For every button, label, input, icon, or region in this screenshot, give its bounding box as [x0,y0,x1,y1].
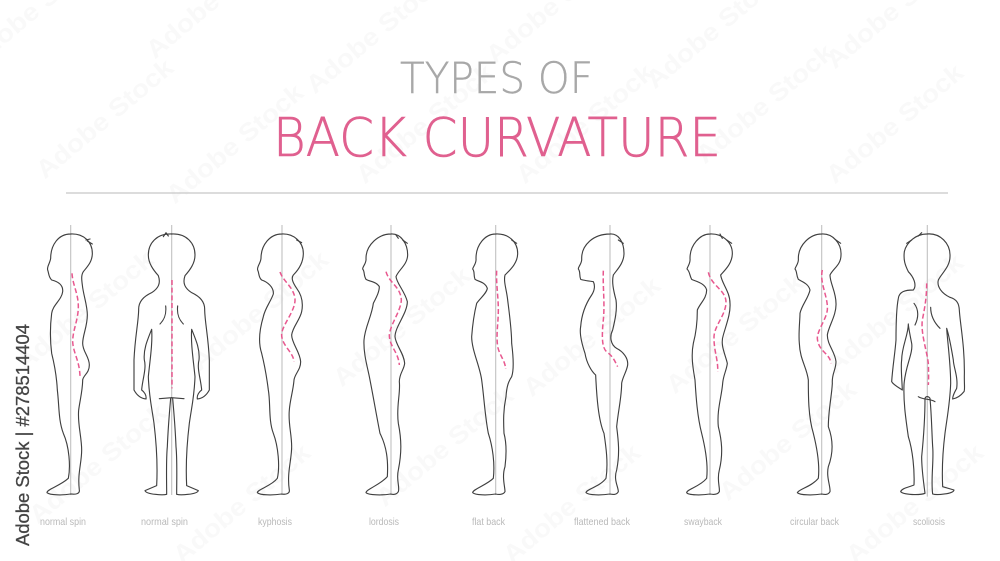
title: types of: TYPES OF [400,54,593,104]
watermark pattern: Adobe Stock [691,38,839,169]
label: kyphosis: kyphosis [258,516,292,528]
figure: swayback [687,225,732,495]
label: lordosis: lordosis [369,516,399,528]
figure: kyphosis [257,225,303,495]
label: scoliosis: scoliosis [913,516,945,528]
label: circular back: circular back [790,516,840,528]
watermark pattern: Adobe Stock [161,78,309,209]
figure: flat back [472,225,518,495]
label: normal spin: normal spin [141,516,188,528]
watermark pattern: Adobe Stock [371,381,519,512]
stock id vertical text: Adobe Stock | #278514404 [13,324,33,546]
watermark pattern: Adobe Stock [24,398,172,529]
title: back curvature: BACK CURVATURE [273,106,721,169]
watermark pattern: Adobe Stock [511,58,659,189]
watermark pattern: Adobe Stock [821,58,969,189]
figure: lordosis [363,225,408,495]
figure: circular back [795,225,841,495]
watermark pattern: Adobe Stock [661,268,809,399]
watermark pattern: Adobe Stock [11,245,159,376]
watermark pattern: Adobe Stock [31,53,179,184]
watermark pattern: Adobe Stock [821,248,969,379]
label: swayback: swayback [684,516,723,528]
watermark pattern: Adobe Stock [714,375,862,506]
watermark pattern: Adobe Stock [328,261,476,392]
label: normal spin: normal spin [40,516,86,528]
watermark pattern: Adobe Stock [186,245,334,376]
figure: normal spin side [47,225,92,495]
label: flat back: flat back [472,516,506,528]
figure: flattened back [578,225,628,495]
watermark pattern: Adobe Stock [518,271,666,402]
figure: scoliosis [892,225,965,497]
label: flattened back: flattened back [574,516,631,528]
watermark pattern: Adobe Stock [351,58,499,189]
figure: normal spin back [134,225,209,495]
